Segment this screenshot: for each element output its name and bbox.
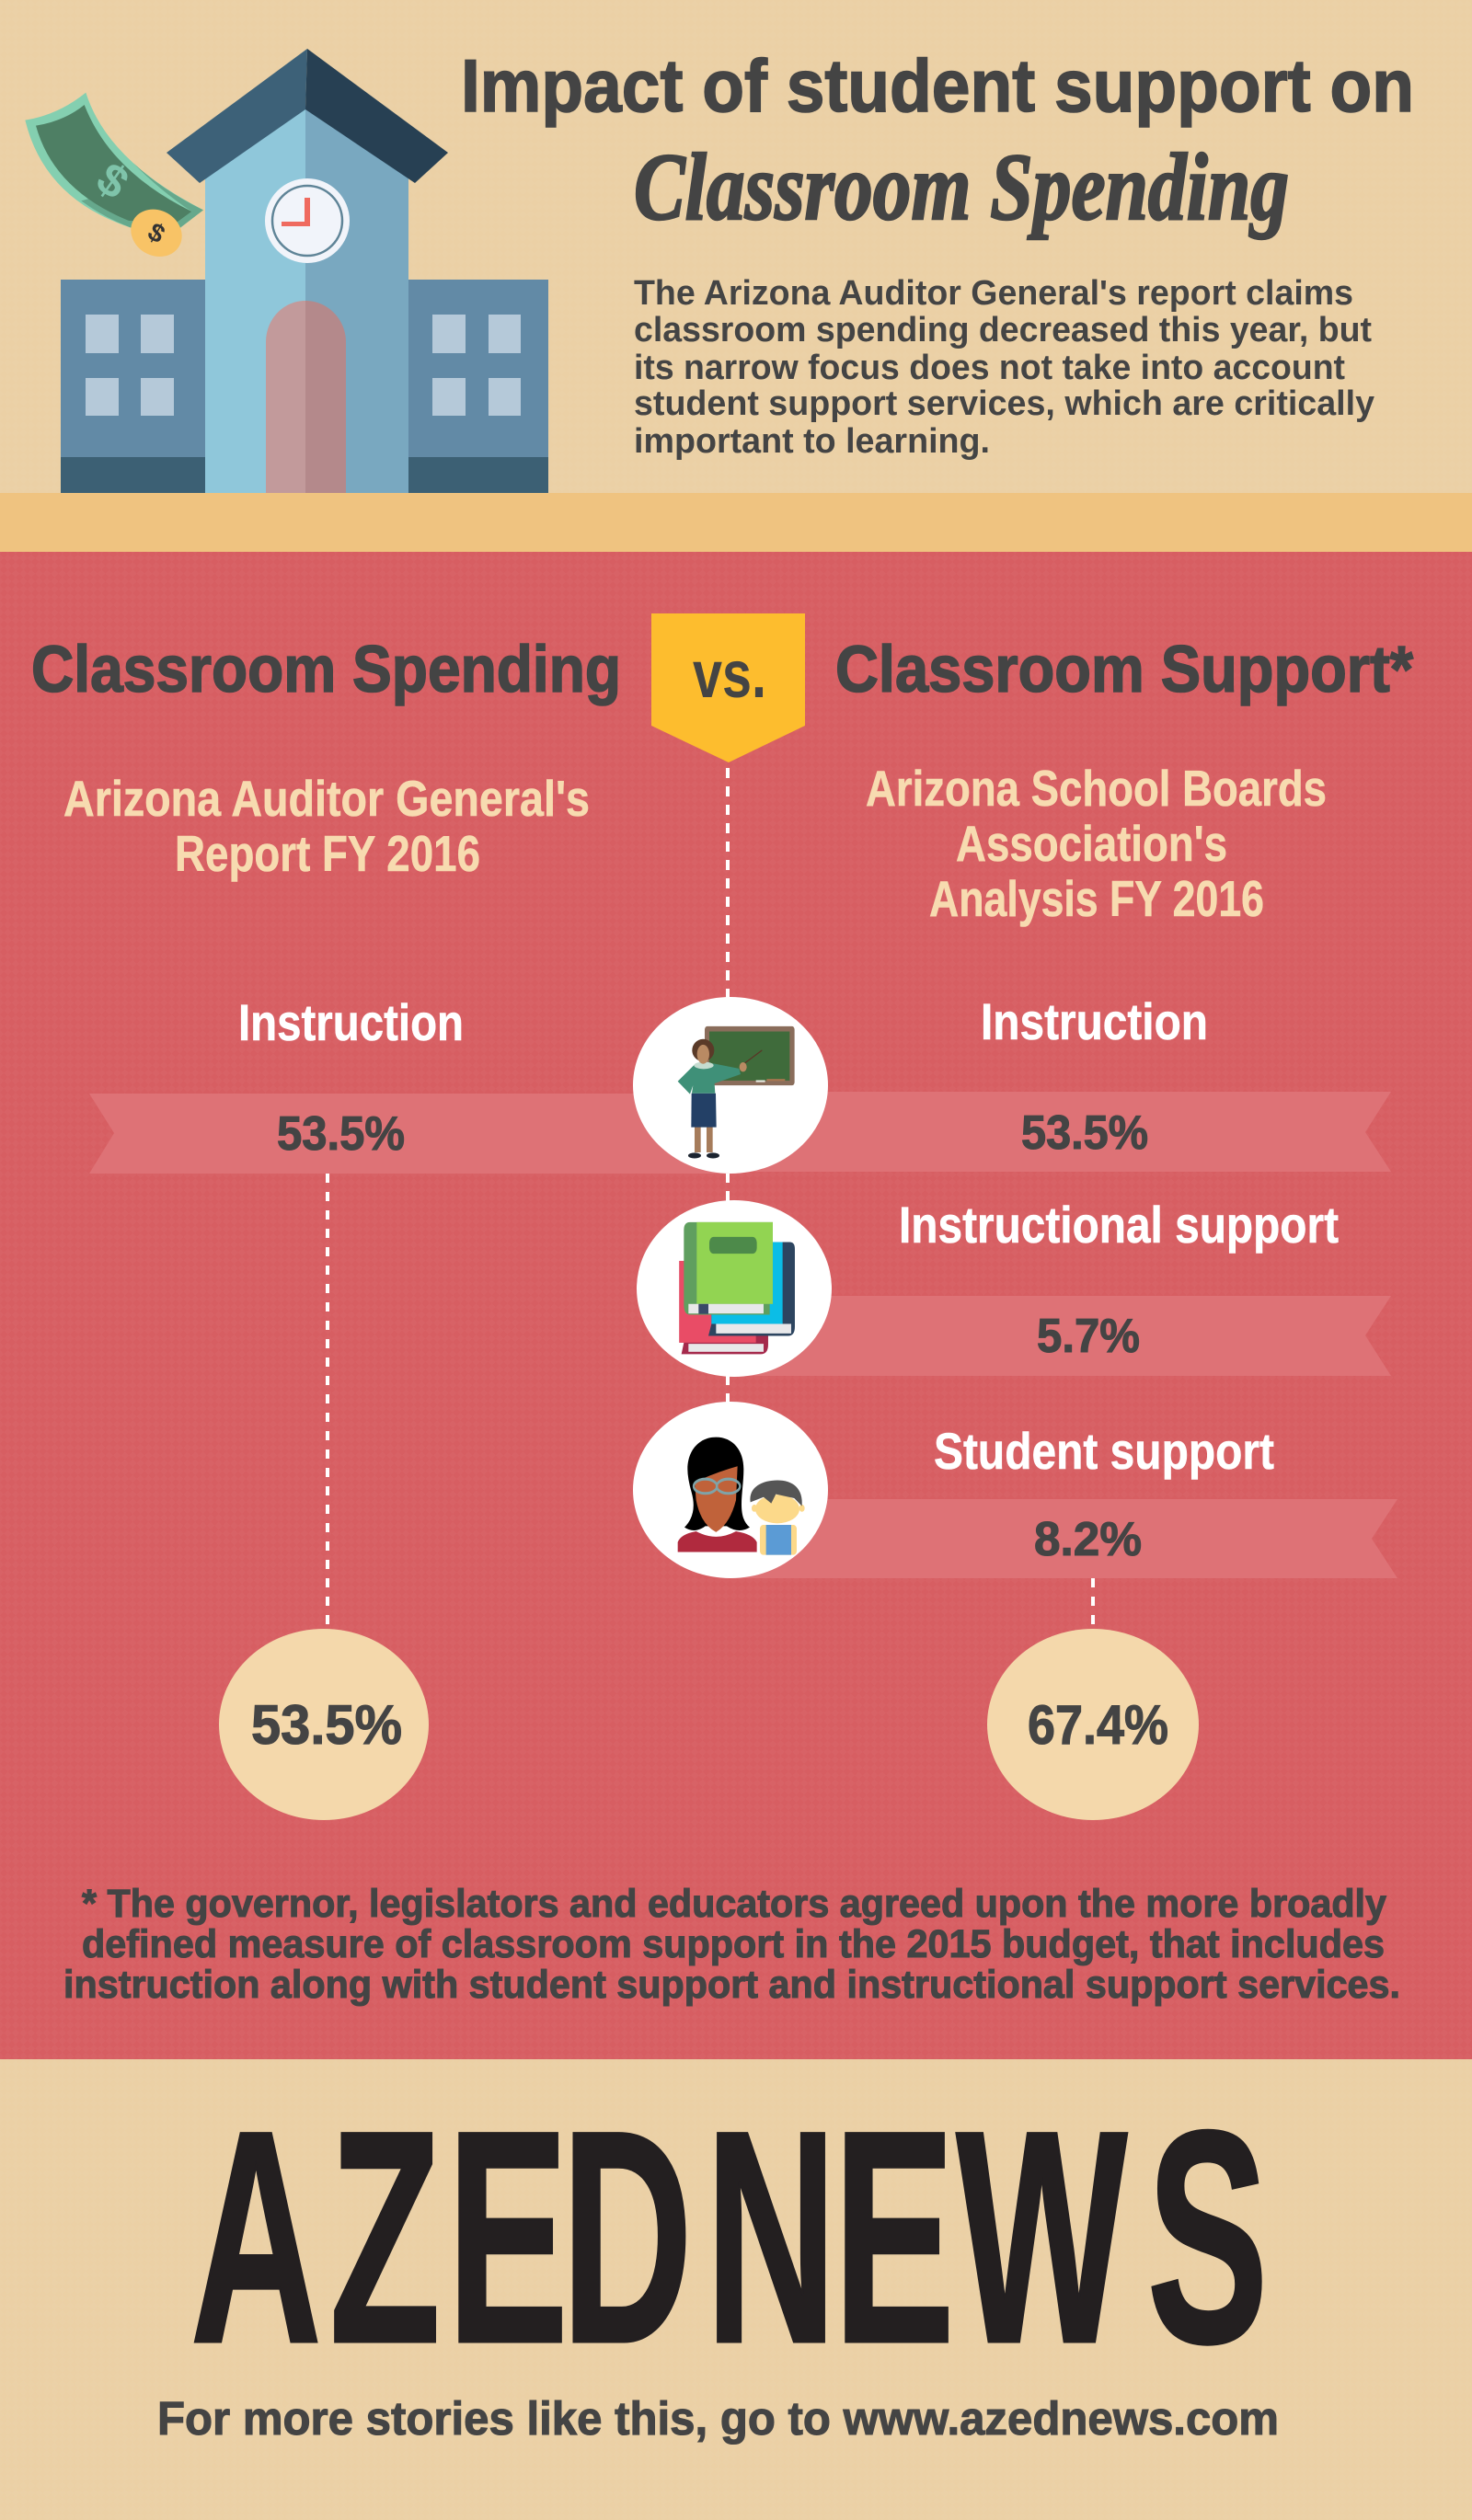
source: auditor general: Report FY 2016: [175, 825, 480, 882]
value: instructional support: 5.7%: [1037, 1310, 1140, 1363]
intro text: classroom spending decreased this year, but: [634, 311, 1372, 349]
ribbon: left instruction: [89, 1094, 736, 1174]
circle: books backdrop: [637, 1200, 832, 1377]
total: classroom spending: 53.5%: [251, 1694, 402, 1756]
footer background: [0, 2059, 1472, 2520]
ribbon: instructional support: [736, 1296, 1391, 1376]
icon: money bill and coin: [25, 93, 203, 266]
footnote: defined measure of classroom support in the 2015 budget, that includes: [82, 1922, 1385, 1966]
heading: classroom spending: Classroom Spending: [31, 634, 621, 706]
label: left instruction: Instruction: [238, 993, 464, 1051]
versus pennant: [651, 613, 805, 762]
label: instructional support: Instructional support: [899, 1196, 1339, 1254]
left dashed connector: [326, 1174, 329, 1626]
centre dashed connector: [726, 768, 730, 1403]
title: Impact of student support on: [461, 45, 1414, 128]
label: student support: Student support: [934, 1422, 1274, 1480]
value: right instruction: 53.5%: [1021, 1106, 1148, 1160]
icon: money bill and coin: $: [87, 153, 138, 209]
intro text: student support services, which are critically: [634, 384, 1374, 423]
icon: school building: [61, 49, 548, 493]
label: right instruction: Instruction: [981, 992, 1208, 1050]
heading: classroom support: Classroom Support*: [835, 634, 1413, 706]
intro text: [634, 274, 1374, 461]
source: auditor general: [63, 770, 590, 882]
icon: stack of books: [679, 1222, 795, 1354]
source: school boards association: [866, 760, 1327, 927]
intro text: important to learning.: [634, 422, 990, 461]
circle: teacher backdrop: [633, 997, 828, 1174]
source: school boards association: Analysis FY 2016: [929, 870, 1264, 927]
source: school boards association: Arizona School Boards: [866, 760, 1327, 817]
total: classroom spending: [219, 1629, 429, 1820]
header background: [0, 0, 1472, 493]
total: classroom support: [987, 1629, 1199, 1820]
logotype: AZEDNEWS: [190, 2068, 1268, 2406]
source: school boards association: Association's: [956, 815, 1227, 872]
total: classroom support: 67.4%: [1028, 1694, 1168, 1756]
intro text: its narrow focus does not take into account: [634, 349, 1345, 387]
source: auditor general: Arizona Auditor General's: [63, 770, 590, 827]
red panel background: [0, 552, 1472, 2059]
icon: teacher at blackboard: [678, 1026, 795, 1158]
call to action: For more stories like this, go to www.azednews.com: [157, 2392, 1279, 2445]
value: student support: 8.2%: [1034, 1513, 1142, 1566]
subtitle: Classroom Spending: [634, 134, 1289, 240]
right dashed connector: [1091, 1578, 1095, 1628]
footnote: [63, 1882, 1400, 2007]
icon: teacher and student: [678, 1438, 805, 1555]
ribbon: right instruction: [727, 1092, 1391, 1172]
icon: money bill and coin: $: [144, 217, 170, 249]
tan band: [0, 493, 1472, 552]
value: left instruction: 53.5%: [277, 1107, 405, 1161]
ribbon: student support: [736, 1499, 1397, 1578]
versus pennant: vs.: [693, 638, 766, 712]
footnote: * The governor, legislators and educators agreed upon the more broadly: [82, 1882, 1386, 1926]
circle: student backdrop: [633, 1402, 828, 1578]
footnote: instruction along with student support and instructional support services.: [63, 1963, 1400, 2007]
intro text: The Arizona Auditor General's report claims: [634, 274, 1353, 313]
